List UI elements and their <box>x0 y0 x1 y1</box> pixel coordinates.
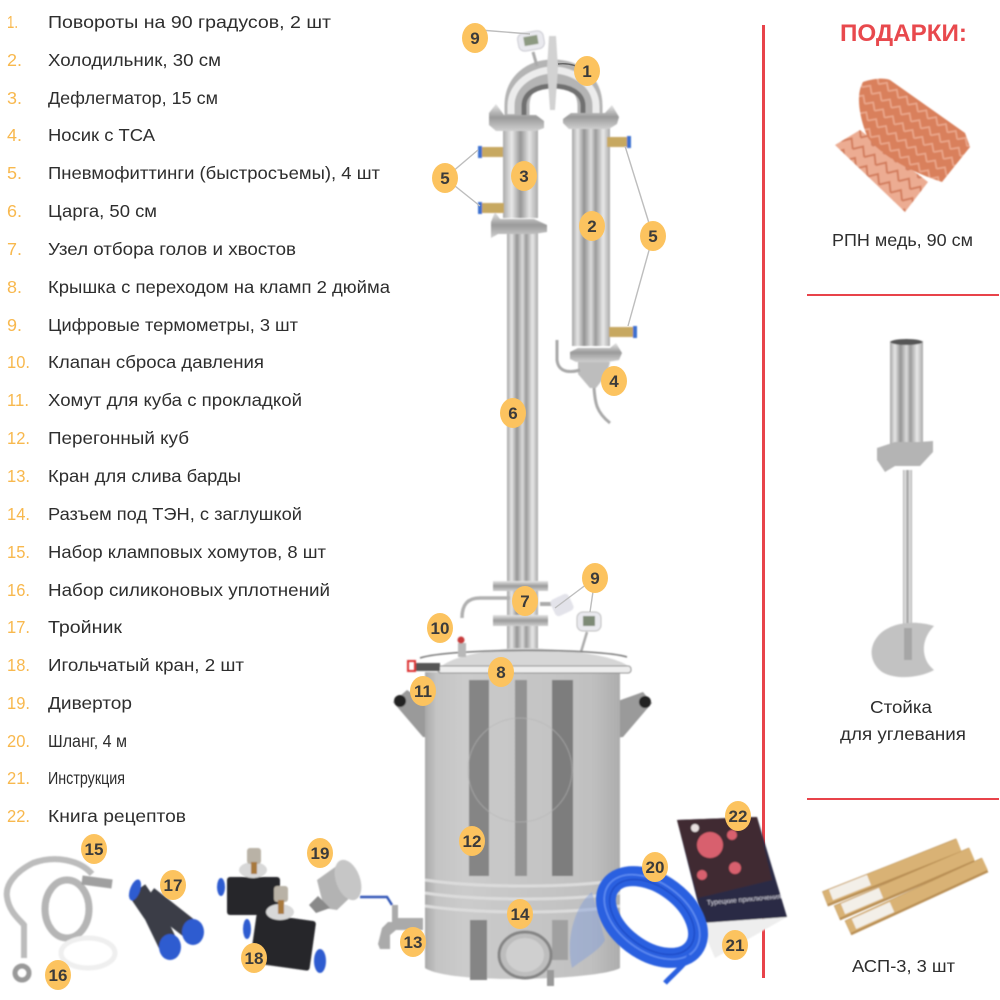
divider <box>807 798 999 800</box>
caption: stand: для углевания <box>840 724 966 744</box>
badge 18 <box>241 943 267 973</box>
badge 2 <box>579 211 605 241</box>
top thermometer <box>517 30 545 66</box>
badge 5 left: 5 <box>440 169 450 188</box>
copper mesh gift <box>835 79 970 212</box>
stand disk <box>872 623 934 677</box>
badge 8 <box>488 657 514 687</box>
item 12: 12. <box>7 428 30 448</box>
badge 5 right: 5 <box>648 227 658 246</box>
gifts heading: ПОДАРКИ: <box>840 20 967 47</box>
badge 5 left <box>432 163 458 193</box>
badge 18: 18 <box>245 949 263 968</box>
item 17 <box>7 617 122 637</box>
badge 5 right <box>640 221 666 251</box>
instruction sheet <box>700 917 787 958</box>
badge 17: 17 <box>164 876 182 895</box>
item 12: Перегонный куб <box>48 428 189 448</box>
fittings <box>478 136 637 338</box>
lower thermometers <box>540 593 601 652</box>
kettle clamp <box>408 661 440 671</box>
column tsarga <box>507 228 538 658</box>
tee fitting <box>127 878 204 960</box>
item 9: 9. <box>7 315 22 335</box>
dephlegmator <box>503 128 538 218</box>
item 6 <box>7 201 157 221</box>
condenser <box>572 128 610 346</box>
badge 17 <box>160 870 186 900</box>
item 21: 21. <box>7 768 30 788</box>
book photo <box>677 817 772 898</box>
badge 22 <box>725 801 751 831</box>
item 17: Тройник <box>48 617 122 637</box>
book cover <box>677 817 787 923</box>
needle valves <box>217 848 326 973</box>
badge 3: 3 <box>519 167 529 186</box>
badge 19: 19 <box>311 844 329 863</box>
badge 13: 13 <box>404 933 422 952</box>
item 14: Разъем под ТЭН, с заглушкой <box>48 504 302 524</box>
beads <box>425 880 620 912</box>
caption: stand <box>840 697 966 744</box>
item 22: Книга рецептов <box>48 806 186 826</box>
kettle <box>360 636 652 986</box>
blue hose <box>570 857 716 983</box>
item 14: 14. <box>7 504 30 524</box>
item 21 <box>7 768 125 788</box>
reflection stripes <box>469 680 489 876</box>
item 16: 16. <box>7 580 30 600</box>
item 4: 4. <box>7 125 22 145</box>
badge 4 <box>601 366 627 396</box>
badge 19 <box>307 838 333 868</box>
body <box>425 672 620 979</box>
badge 12: 12 <box>463 832 481 851</box>
item 13: Кран для слива барды <box>48 466 241 486</box>
item 4 <box>7 125 155 145</box>
item 13: 13. <box>7 466 30 486</box>
item 5: Пневмофиттинги (быстросъемы), 4 шт <box>48 163 380 183</box>
item 5: 5. <box>7 163 22 183</box>
column assembly: pipes, clamps, U-bend <box>462 30 637 658</box>
item 6: 6. <box>7 201 22 221</box>
badge 11: 11 <box>414 682 432 701</box>
item 8: 8. <box>7 277 22 297</box>
handles <box>393 690 433 738</box>
flower <box>691 824 741 880</box>
badge 1 <box>574 56 600 86</box>
tube labels <box>831 880 892 924</box>
item 19 <box>7 693 132 713</box>
badge 21: 21 <box>726 936 744 955</box>
gasket <box>61 938 115 968</box>
divertor <box>309 856 366 913</box>
item 2: 2. <box>7 50 22 70</box>
badge 2: 2 <box>587 217 597 236</box>
badge 12 <box>459 826 485 856</box>
caption: tubes: АСП-3, 3 шт <box>852 956 955 976</box>
badge 14 <box>507 899 533 929</box>
item 19: Дивертор <box>48 693 132 713</box>
badge 4: 4 <box>609 372 619 391</box>
badge 15 <box>81 834 107 864</box>
item 11: Хомут для куба с прокладкой <box>48 390 302 410</box>
item 7: Узел отбора голов и хвостов <box>48 239 296 259</box>
badge 9 top <box>462 23 488 53</box>
item 4: Носик с ТСА <box>48 125 155 145</box>
lid <box>440 648 630 668</box>
badge 6: 6 <box>508 404 518 423</box>
clamp <box>7 859 112 980</box>
emblem <box>468 718 572 822</box>
badge 13 <box>400 927 426 957</box>
item 21: Инструкция <box>48 768 125 788</box>
item 3: 3. <box>7 88 22 108</box>
item 17: 17. <box>7 617 30 637</box>
charring stand <box>872 339 934 677</box>
item 20: Шланг, 4 м <box>48 731 127 751</box>
drain tap <box>360 897 423 949</box>
item 20 <box>7 731 127 751</box>
badge 7: 7 <box>520 592 530 611</box>
stand tube <box>890 341 923 447</box>
item 15: Набор кламповых хомутов, 8 шт <box>48 542 326 562</box>
badge 10: 10 <box>431 619 449 638</box>
badge 20: 20 <box>646 858 664 877</box>
book and instruction <box>677 817 787 958</box>
item 6: Царга, 50 см <box>48 201 157 221</box>
item 10: 10. <box>7 352 30 372</box>
pressure valve <box>458 636 466 657</box>
U bend <box>511 70 596 118</box>
head outlet <box>462 598 510 618</box>
middle clamp <box>491 212 547 238</box>
numbered parts list <box>7 12 390 826</box>
stand clamp <box>877 441 933 472</box>
badge 21 <box>722 930 748 960</box>
badge 22: 22 <box>729 807 747 826</box>
bend clamps <box>489 104 544 131</box>
item 7: 7. <box>7 239 22 259</box>
caption: stand: Стойка <box>870 697 932 717</box>
item 10: Клапан сброса давления <box>48 352 264 372</box>
spout pipes <box>557 340 610 423</box>
item 16: Набор силиконовых уплотнений <box>48 580 330 600</box>
badge 9 top: 9 <box>470 29 480 48</box>
badge 8: 8 <box>496 663 506 682</box>
item 22: 22. <box>7 806 30 826</box>
badge 9 lower <box>582 563 608 593</box>
item 18: Игольчатый кран, 2 шт <box>48 655 244 675</box>
badge 3 <box>511 161 537 191</box>
item 19: 19. <box>7 693 30 713</box>
T piece <box>547 36 558 110</box>
badge 14: 14 <box>511 905 530 924</box>
badge 6 <box>500 398 526 428</box>
stand rod <box>903 470 912 660</box>
item 9: Цифровые термометры, 3 шт <box>48 315 298 335</box>
badge 16 <box>45 960 71 990</box>
item 1: Повороты на 90 градусов, 2 шт <box>48 12 331 32</box>
leader lines <box>445 30 653 612</box>
badge 7 <box>512 586 538 616</box>
caption: copper mesh: РПН медь, 90 см <box>832 230 973 250</box>
item 2: Холодильник, 30 см <box>48 50 221 70</box>
badge 20 <box>642 852 668 882</box>
item 20: 20. <box>7 731 30 751</box>
badge 1: 1 <box>582 62 592 81</box>
badge 11 <box>410 676 436 706</box>
item 11: 11. <box>7 390 29 410</box>
badge 9 lower: 9 <box>590 569 600 588</box>
item 18: 18. <box>7 655 30 675</box>
badge 16: 16 <box>49 966 67 985</box>
badge 15: 15 <box>85 840 103 859</box>
lower clamps <box>493 581 548 591</box>
badge 10 <box>427 613 453 643</box>
accessories row <box>7 848 366 980</box>
item 8: Крышка с переходом на кламп 2 дюйма <box>48 277 390 297</box>
number badges <box>45 23 751 990</box>
ASP tubes <box>825 845 985 928</box>
item 1: 1. <box>7 12 18 32</box>
book title: Турецкие приключения <box>707 893 782 907</box>
condenser bottom clamp <box>570 343 622 362</box>
divider <box>807 294 999 296</box>
heater port <box>499 932 554 986</box>
item 15: 15. <box>7 542 30 562</box>
item 3: Дефлегматор, 15 см <box>48 88 218 108</box>
red vertical divider <box>762 25 765 978</box>
